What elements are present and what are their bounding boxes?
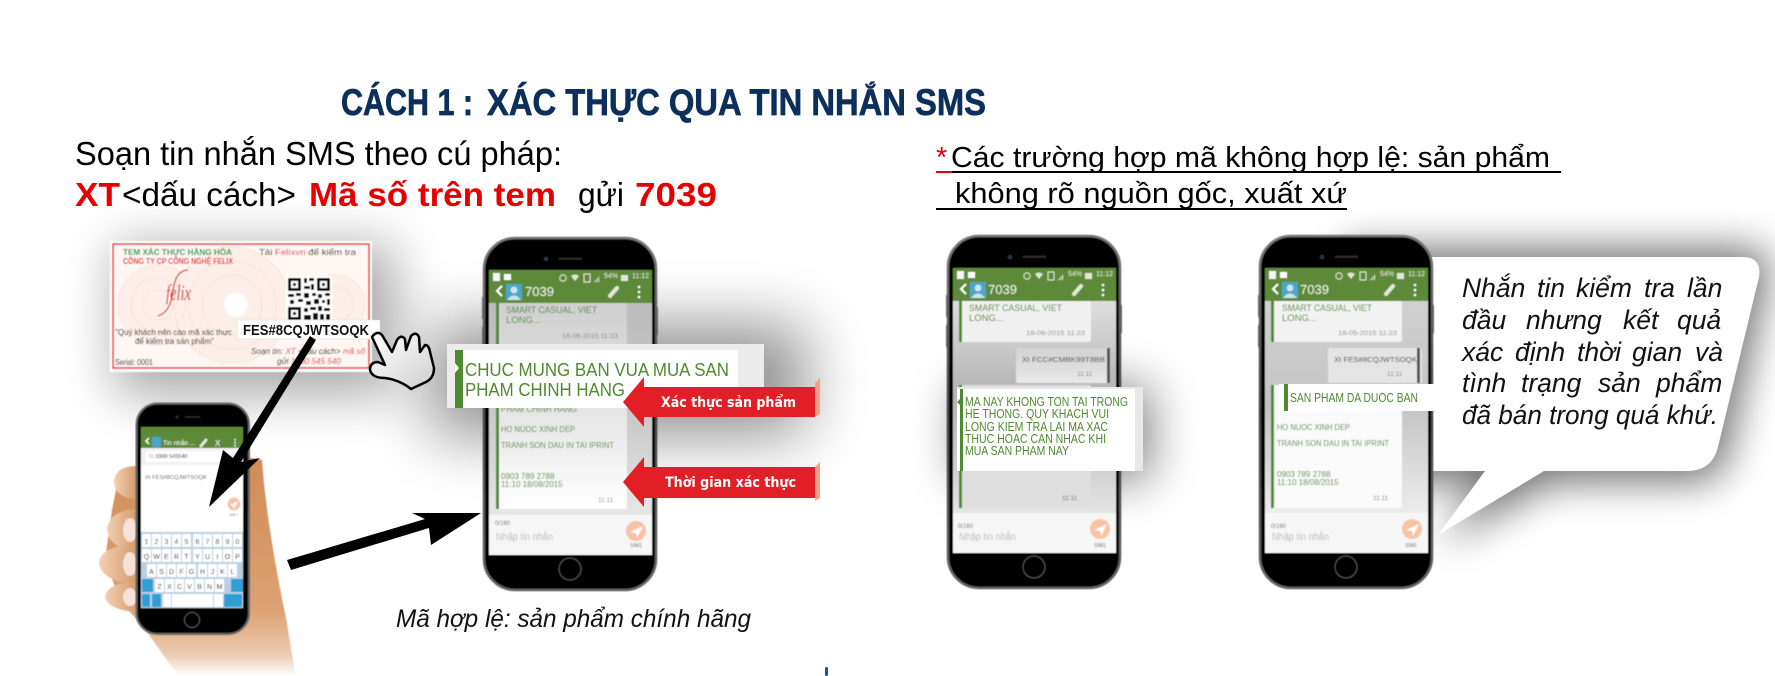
message bubble: PHAM CHINH HANG [501, 405, 577, 414]
popup: code does not exist message [957, 387, 1143, 471]
phone: code does not exist: LONG... [969, 313, 1004, 324]
keyboard: 1234567890 [145, 539, 240, 546]
speech bubble text: đã bán trong quá khứ. [1462, 400, 1718, 430]
phone: code already sold: 11:11 [1373, 495, 1389, 502]
message bubble: TRANH SON DAU IN TAI IPRINT [501, 441, 614, 450]
red arrow: verification time [623, 457, 820, 507]
speech bubble text: kiểm [1576, 273, 1632, 303]
code label on stamp: FES#8CQJWTSOQK [243, 322, 369, 339]
red arrow: product verification: Xác thực sản phẩm [661, 394, 796, 411]
message bubble: 11:10 18/08/2015 [501, 480, 563, 489]
message bubble: 0903 789 2788 [501, 472, 555, 481]
title [341, 81, 986, 123]
main phone: valid result: 7039 [525, 284, 554, 299]
heading: invalid code cases [936, 142, 1561, 210]
red arrow: verification time: Thời gian xác thực [665, 475, 796, 491]
phone: code does not exist: SIM1 [1094, 543, 1106, 549]
speech bubble text: nhưng [1526, 305, 1602, 335]
phone: code already sold: 11:10 18/08/2015 [1277, 478, 1339, 487]
message bubble: 11:11 [598, 497, 614, 504]
instruction text: SMS syntax: <dấu cách> [122, 176, 296, 213]
speech bubble text: trạng [1521, 368, 1582, 398]
main phone: valid result: 0/160 [495, 521, 511, 527]
heading: invalid code cases: Các trường hợp mã không hợp lệ: sản phẩm [951, 142, 1550, 174]
cropped mark at bottom [825, 667, 828, 676]
speech bubble text: thời [1577, 337, 1622, 367]
main phone: valid result: Nhập tin nhắn [496, 530, 553, 543]
small phone: composing SMS: X [215, 439, 221, 448]
speech bubble text: sản [1598, 368, 1641, 398]
popup: code does not exist message: HE THONG. QUY KHACH VUI [965, 406, 1109, 421]
phone: code already sold: 54% [1380, 271, 1394, 278]
phone: code does not exist: Xt FCC#CMBK99T8BB [1022, 355, 1105, 364]
speech bubble text: tin [1537, 273, 1565, 303]
instruction text: SMS syntax: Mã số trên tem [309, 176, 556, 213]
phone: code already sold: 7039 [1300, 282, 1329, 297]
felix logo [158, 270, 191, 316]
title: CÁCH 1 : [341, 82, 473, 123]
speech bubble text: tình [1462, 368, 1506, 398]
phone: code already sold: SMART CASUAL, VIET [1282, 303, 1372, 314]
small phone: composing SMS: To 1900 545540 [148, 454, 187, 460]
phone: code already sold: LONG... [1282, 313, 1317, 324]
message bubble: LONG... [506, 315, 541, 326]
phone: code does not exist: 11:11 [1062, 495, 1078, 502]
hand holding phone [99, 458, 296, 676]
message bubble: HO NUOC XINH DEP [501, 425, 575, 434]
speech bubble text: và [1695, 337, 1723, 367]
small phone: composing SMS [136, 404, 249, 634]
phone: code does not exist: 7039 [988, 282, 1017, 297]
authentication stamp: CÔNG TY CP CÔNG NGHỆ FELIX [123, 257, 234, 266]
message bubble: SMART CASUAL, VIET [506, 305, 597, 316]
popup: code does not exist message: LONG KIEM TRA LAI MA XAC [965, 419, 1108, 434]
phone: code does not exist: Nhập tin nhắn [959, 530, 1016, 543]
speech bubble text: định [1515, 337, 1565, 367]
phone: code already sold: 11:11 [1387, 371, 1403, 378]
authentication stamp: Soạn tin: XT <dấu cách> mã số [251, 347, 367, 356]
arrow: code to composing phone [209, 336, 316, 507]
authentication stamp: gửi 1900 545 540 [277, 356, 341, 366]
popup: code does not exist message: THUC HOAC CAN NHAC KHI [965, 431, 1106, 446]
popup: product already sold [1279, 384, 1457, 411]
authentication stamp: Serial: 0001 [115, 358, 153, 367]
popup: code does not exist message: MA NAY KHONG TON TAI TRONG [965, 394, 1128, 409]
instruction text: SMS syntax: 7039 [635, 176, 717, 213]
speech bubble text: tra [1644, 273, 1675, 303]
phone: code already sold: 0903 789 2788 [1277, 470, 1331, 479]
authentication stamp: để kiểm tra sản phẩm" [135, 337, 214, 346]
speech bubble text: kết [1623, 305, 1660, 335]
phone: code does not exist [946, 236, 1122, 588]
authentication stamp: Tải Felixvn để kiểm tra [259, 247, 356, 257]
message bubble [496, 303, 627, 509]
main phone: valid result: SIM1 [630, 543, 642, 549]
red arrow: product verification [623, 377, 820, 427]
phone: code already sold: Nhập tin nhắn [1272, 530, 1329, 543]
phone: code already sold: TRANH SON DAU IN TAI IPRINT [1277, 439, 1389, 448]
popup: product already sold: SAN PHAM DA DUOC BAN [1290, 390, 1418, 405]
felix logo: felix [166, 280, 191, 305]
phone: code does not exist: 11:11 [1077, 371, 1093, 378]
phone: code already sold: Xt FES#8CQJWTSOQK [1334, 355, 1417, 364]
instruction text: SMS syntax: gửi [578, 176, 624, 213]
phone: code already sold: 18-05-2015 11:23 [1338, 330, 1397, 337]
small phone: composing SMS: SIM 1 [229, 513, 239, 517]
phone: code already sold: HO NUOC XINH DEP [1277, 423, 1350, 432]
speech bubble text: xác [1460, 337, 1503, 367]
popup: authentic product message [447, 344, 764, 408]
title: XÁC THỰC QUA TIN NHẮN SMS [487, 81, 986, 123]
background shadow: speech bubble [1345, 248, 1769, 545]
phone: code does not exist: 11:12 [1096, 271, 1113, 278]
speech bubble text: Nhắn [1462, 273, 1525, 303]
keyboard: ASDFGHJKL [149, 569, 235, 576]
popup: authentic product message: PHAM CHINH HANG [465, 380, 625, 400]
keyboard: QWERTYUIOP [144, 554, 240, 561]
message bubble: 18-06-2015 11:23 [562, 333, 618, 340]
phone: code already sold [1258, 236, 1434, 588]
keyboard [141, 532, 243, 608]
speech bubble text: quả [1677, 305, 1721, 335]
instruction text: SMS syntax [75, 135, 717, 213]
phone: code does not exist: 18-06-2015 11:23 [1026, 330, 1085, 337]
speech bubble text: đầu [1462, 305, 1506, 335]
authentication stamp: "Quý khách nên cào mã xác thực [115, 328, 232, 337]
phone: code already sold: 0/160 [1271, 524, 1287, 530]
authentication stamp [110, 241, 372, 372]
keyboard: ZXCVBNM [157, 584, 223, 591]
heading: invalid code cases: không rõ nguồn gốc, xuất xứ [955, 178, 1347, 210]
small phone: composing SMS: Tin nhắn ... [163, 438, 195, 447]
main phone: valid result: 54% [604, 273, 618, 280]
main phone: valid result: 11:12 [632, 273, 649, 280]
phone: code does not exist: SMART CASUAL, VIET [969, 303, 1062, 314]
phone: code does not exist: 0/160 [958, 524, 974, 530]
phone: code already sold: SIM1 [1405, 543, 1417, 549]
speech bubble text: gian [1632, 337, 1682, 367]
popup: authentic product message: CHUC MUNG BAN VUA MUA SAN [465, 360, 729, 380]
authentication stamp: TEM XÁC THỰC HÀNG HÓA [123, 246, 232, 257]
heading: invalid code cases: * [936, 142, 947, 174]
small phone: composing SMS: Xt FES#8CQJWTSOQK [145, 475, 208, 481]
phone: code does not exist: 54% [1068, 271, 1082, 278]
speech bubble text: phẩm [1655, 368, 1722, 398]
background shadow: invalid code popup [960, 385, 1150, 480]
fingers [99, 466, 137, 612]
background shadow: main popup [430, 325, 805, 435]
background shadow: stamp [115, 245, 395, 395]
main phone: valid result [482, 238, 658, 590]
instruction text: SMS syntax: Soạn tin nhắn SMS theo cú pháp: [75, 135, 562, 172]
speech bubble [1425, 257, 1759, 535]
phone: code already sold: 11:12 [1408, 271, 1425, 278]
caption: valid code: Mã hợp lệ: sản phẩm chính hãng [396, 605, 751, 633]
speech bubble text: lần [1687, 273, 1722, 303]
icon: pointing hand [370, 333, 434, 389]
instruction text: SMS syntax: XT [75, 176, 120, 213]
speech bubble text [1460, 273, 1723, 430]
arrow: composing phone to result phone [287, 513, 481, 570]
QR code [286, 276, 332, 322]
popup: code does not exist message: MUA SAN PHAM NAY [965, 443, 1069, 458]
